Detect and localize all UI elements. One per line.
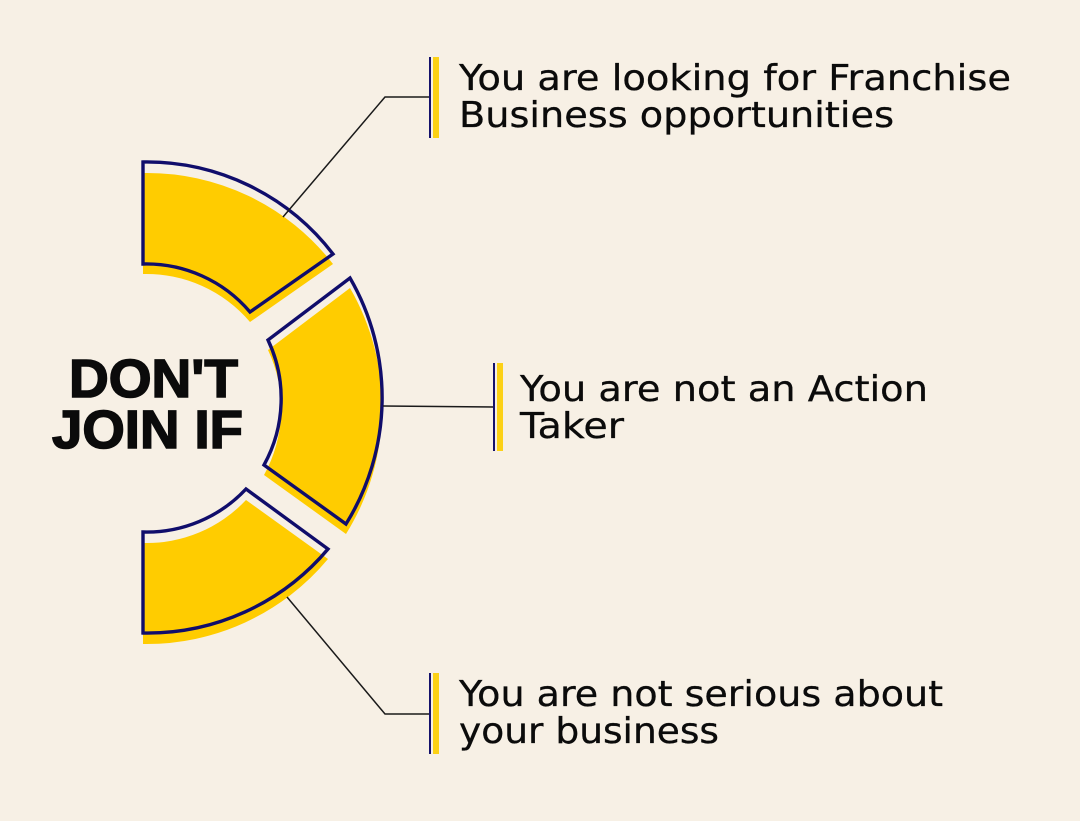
connector: middle bbox=[383, 406, 494, 407]
text: not serious bbox=[458, 674, 943, 752]
text: action taker: You are not an Action bbox=[519, 369, 928, 410]
text: franchise business: You are looking for Franchise bbox=[458, 58, 1011, 99]
connector: bottom bbox=[287, 597, 430, 714]
heading: don't join if bbox=[52, 349, 243, 460]
heading: don't join if: JOIN IF bbox=[52, 400, 243, 460]
marker: top bar bbox=[429, 57, 439, 138]
text: franchise business: Business opportunities bbox=[459, 95, 894, 136]
segment: middle arc bbox=[264, 278, 382, 534]
text: franchise business bbox=[458, 58, 1011, 136]
segment: top arc bbox=[143, 162, 333, 322]
text: not serious: You are not serious about bbox=[458, 674, 943, 715]
text: not serious: your business bbox=[459, 711, 719, 752]
text: action taker bbox=[519, 369, 928, 447]
segment: bottom arc bbox=[143, 489, 328, 644]
connector: top bbox=[283, 97, 430, 217]
marker: bottom bar bbox=[429, 673, 439, 754]
marker: middle bar bbox=[493, 363, 503, 451]
text: action taker: Taker bbox=[519, 406, 624, 447]
heading: don't join if: DON'T bbox=[69, 349, 238, 409]
